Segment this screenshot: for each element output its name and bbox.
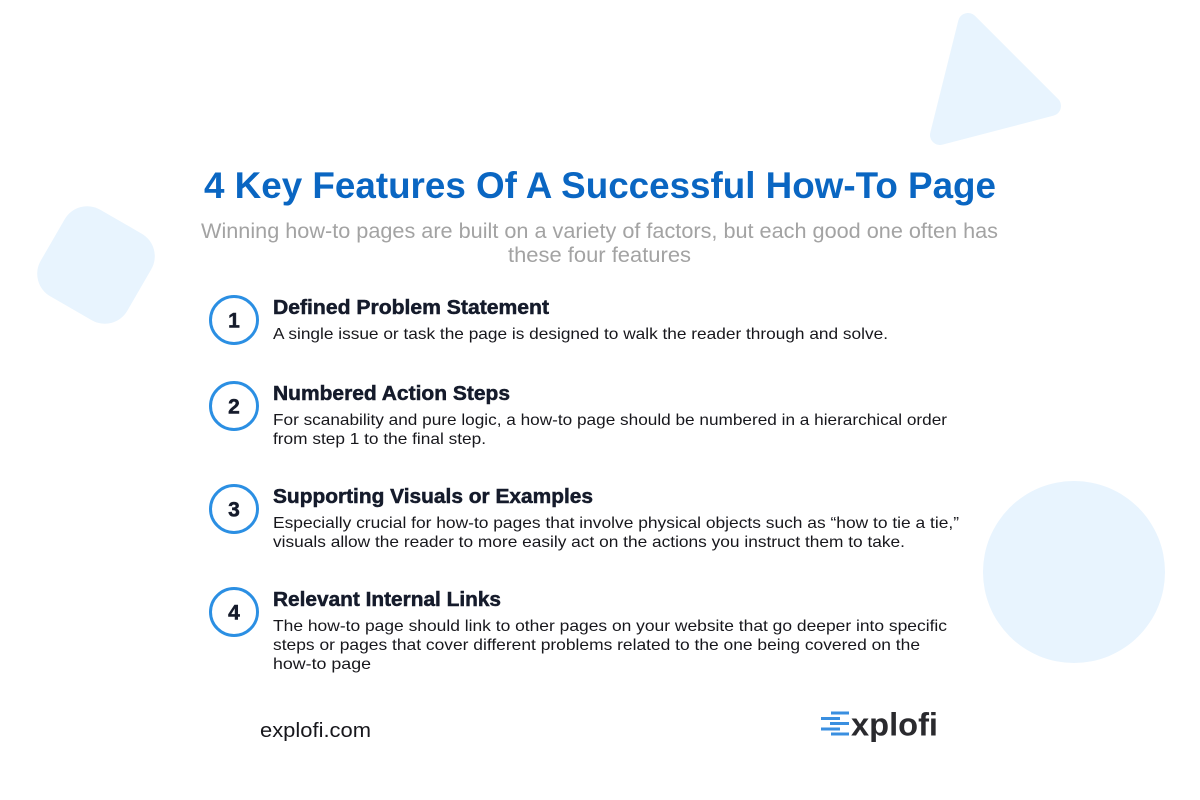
number badge 1	[210, 296, 258, 344]
feature 2 text	[273, 412, 948, 448]
number badge 3	[210, 486, 258, 532]
subtitle	[201, 220, 998, 267]
feature 1 text: A single issue or task the page is designed to walk the reader through and solve.	[273, 326, 888, 343]
feature 2 heading: Numbered Action Steps	[273, 383, 510, 405]
feature 2 text: For scanability and pure logic, a how-to page should be numbered in a hierarchical order	[273, 412, 948, 429]
website url: explofi.com	[260, 720, 371, 742]
number badge 2: 2	[228, 396, 240, 418]
number badge 2	[210, 382, 258, 430]
feature 4 text: steps or pages that cover different problems related to the one being covered on the	[273, 637, 920, 654]
feature 1	[210, 296, 888, 344]
feature 4 heading: Relevant Internal Links	[273, 589, 501, 611]
feature 4 text: The how-to page should link to other pages on your website that go deeper into specific	[273, 618, 947, 635]
logo wordmark: xplofi	[851, 706, 938, 742]
number badge 1: 1	[228, 310, 240, 332]
feature 3 heading: Supporting Visuals or Examples	[273, 486, 593, 508]
feature 2	[210, 382, 948, 448]
feature 3 text: Especially crucial for how-to pages that involve physical objects such as “how to tie a tie,”	[273, 515, 959, 532]
decorative circle	[983, 481, 1165, 663]
number badge 4: 4	[228, 602, 240, 624]
feature 4	[210, 588, 947, 673]
subtitle: Winning how-to pages are built on a variety of factors, but each good one often has	[201, 220, 998, 243]
decorative rounded square	[28, 197, 164, 333]
logo	[821, 706, 938, 742]
feature 3 text: visuals allow the reader to more easily act on the actions you instruct them to take.	[273, 534, 905, 551]
decorative triangle	[940, 23, 1051, 135]
number badge 4	[210, 588, 258, 636]
feature 3 text	[273, 515, 959, 551]
logo icon: stacked lines	[821, 712, 849, 736]
title: 4 Key Features Of A Successful How-To Page	[204, 165, 996, 206]
feature 2 text: from step 1 to the final step.	[273, 431, 486, 448]
number badge 3: 3	[228, 498, 240, 522]
feature 1 heading: Defined Problem Statement	[273, 297, 549, 319]
feature 3	[210, 486, 959, 551]
subtitle: these four features	[508, 244, 691, 267]
feature 4 text	[273, 618, 947, 673]
feature 4 text: how-to page	[273, 656, 371, 673]
